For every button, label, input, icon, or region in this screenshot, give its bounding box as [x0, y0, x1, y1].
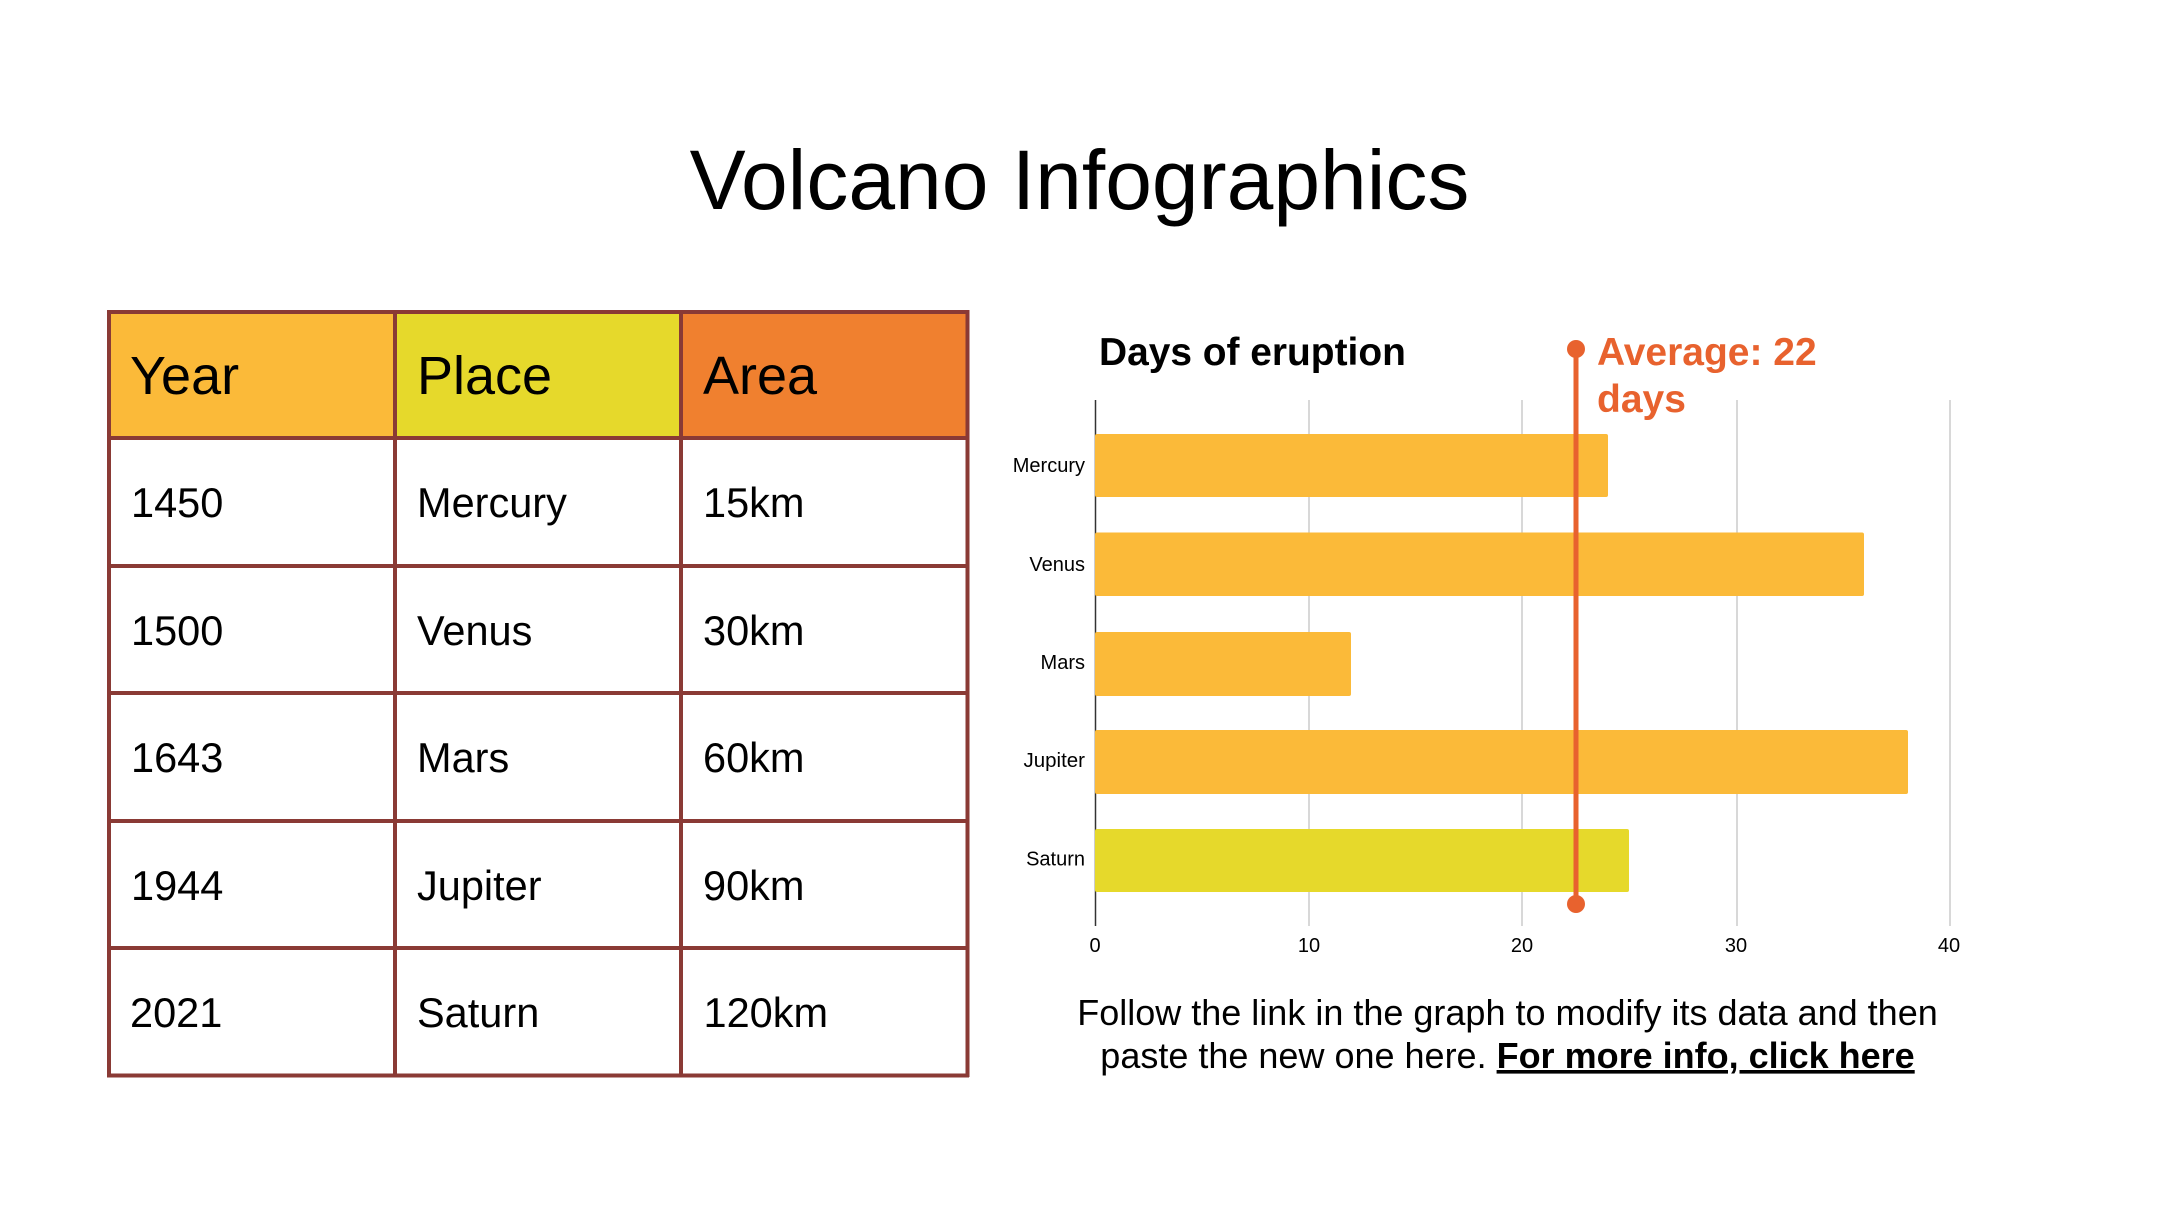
table row: 1944: Jupiter	[417, 862, 542, 909]
table row: 1500: 30km	[703, 607, 804, 654]
header cell: Area	[681, 312, 968, 438]
average label: Average: 22	[1597, 331, 1817, 374]
bar: Saturn 25	[1026, 829, 1629, 892]
table row: 1944: 90km	[703, 862, 804, 909]
x axis labels: 10	[1298, 935, 1320, 957]
caption with link: paste the new one here. For more info, click here	[1100, 1035, 1915, 1076]
header cell: Year	[109, 312, 395, 438]
table row: 2021: 120km	[704, 989, 828, 1036]
table row: 1450	[131, 479, 804, 526]
table row: 1500: 1500	[131, 607, 223, 654]
header cell: Place: Place	[417, 346, 552, 406]
bar: Mars 12: Mars	[1041, 652, 1085, 674]
bar: Jupiter 38: Jupiter	[1023, 749, 1085, 772]
table row: 1643: 60km	[703, 734, 804, 781]
bar: Saturn 25: Saturn	[1026, 848, 1085, 870]
table: eruptions by year, place and area	[107, 310, 969, 1077]
x axis labels: 0	[1089, 935, 1101, 957]
table row: 1643: Mars	[417, 734, 509, 781]
x axis labels	[1089, 935, 1960, 957]
x axis labels: 30	[1725, 935, 1747, 957]
average marker line	[1567, 340, 1585, 913]
table row: 2021	[130, 989, 828, 1036]
table row: 2021: 2021	[130, 989, 222, 1036]
table row: 1500: Venus	[417, 607, 532, 654]
x axis labels: 20	[1511, 935, 1533, 957]
table row: 1450: Mercury	[417, 479, 567, 526]
table row: 1450: 15km	[703, 479, 804, 526]
x axis labels: 40	[1938, 935, 1960, 957]
bar: Venus 36: Venus	[1029, 554, 1085, 576]
header cell: Place	[395, 312, 681, 438]
title: Volcano Infographics	[690, 133, 1469, 227]
chart title: Days of eruption	[1099, 331, 1406, 374]
bar: Mercury 24: Mercury	[1013, 455, 1085, 477]
header cell: Year: Year	[130, 346, 239, 406]
bar: Mars 12	[1041, 632, 1351, 696]
table row: 2021: Saturn	[417, 989, 539, 1036]
table row: 1500	[131, 607, 804, 654]
bar: Jupiter 38	[1023, 730, 1908, 794]
caption with link: Follow the link in the graph to modify its data and then	[1077, 992, 1938, 1033]
table row: 1944: 1944	[131, 862, 223, 909]
header cell: Area: Area	[703, 346, 818, 406]
average label: days	[1597, 378, 1686, 421]
bar: Mercury 24	[1013, 434, 1608, 497]
table row: 1643: 1643	[131, 734, 223, 781]
table row: 1450: 1450	[131, 479, 223, 526]
bar chart: days of eruption	[1013, 331, 1960, 957]
table row: 1944	[131, 862, 804, 909]
table row: 1643	[131, 734, 804, 781]
bar: Venus 36	[1029, 532, 1864, 596]
